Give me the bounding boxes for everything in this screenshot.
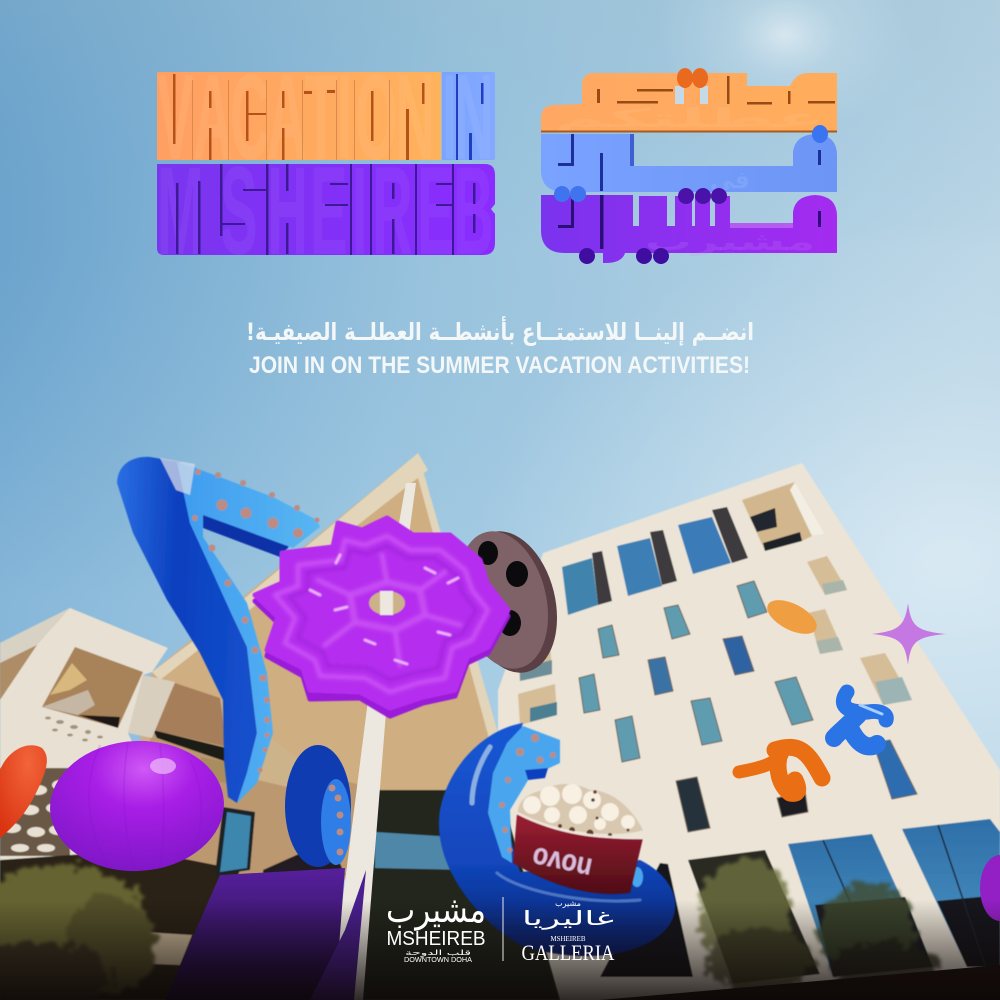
blue tentacle right (439, 723, 675, 956)
upper wide window 2 (617, 530, 677, 596)
brand on bucket: novo (529, 840, 595, 885)
purple sparkle (872, 603, 946, 665)
line 1 orange: عطلتكم (554, 104, 824, 134)
photo: right office building (498, 463, 1000, 1000)
ground floor dark zone (0, 850, 240, 1000)
logo: Msheireb: قلب الدوحة (405, 949, 471, 957)
pillar (128, 675, 175, 738)
title: Arabic (541, 68, 837, 264)
logo: Msheireb: مشيرب (386, 890, 486, 931)
bucket (513, 813, 643, 894)
logo divider (502, 897, 504, 961)
purple lattice star (255, 518, 508, 716)
popcorn (518, 784, 643, 837)
logo: Msheireb: DOWNTOWN DOHA (404, 957, 472, 964)
subtitle English: JOIN IN ON THE SUMMER VACATION ACTIVITIES! (249, 352, 750, 379)
pergola bottom right (600, 965, 1000, 1000)
line 2 blue (541, 125, 837, 194)
recessed balconies (518, 556, 912, 725)
MSHEIREB: MSHEIREB (157, 141, 494, 281)
upper wide window 3 (678, 507, 748, 574)
corner recess with window (742, 482, 825, 551)
suckers (192, 469, 320, 772)
screen dots (45, 716, 103, 742)
subtitle Arabic: انضــم إلينــا للاستمتــاع بأنشطــة العطلــة الصيفيـة! (246, 316, 754, 346)
line 1 orange (541, 68, 837, 134)
trees right (699, 857, 940, 994)
dark purple box base (165, 868, 366, 1000)
logo: Msheireb Galleria: MSHEIREB (550, 934, 586, 943)
sucker band (177, 462, 320, 803)
right tentacle sucker band (488, 726, 560, 863)
photo: left building with triangular roof (0, 453, 560, 1000)
glass side of the left block (263, 840, 345, 880)
logo: Msheireb: MSHEIREB (386, 928, 486, 950)
roof soffit (130, 453, 500, 800)
IN: IN (442, 49, 494, 186)
line 3 purple (541, 186, 837, 264)
tentacle underside strip (198, 510, 292, 557)
purple blob right edge (980, 855, 1000, 921)
orange squiggle blob (739, 747, 822, 793)
logo: Msheireb Galleria: GALLERIA (522, 940, 615, 965)
upper wide window 1 (562, 551, 612, 615)
dark bottom fade (0, 900, 1000, 1000)
blue squiggle blob (834, 692, 886, 746)
cream highlight (160, 458, 195, 495)
tentacle highlight (472, 747, 490, 803)
lower wall (150, 730, 380, 880)
logo: Msheireb (386, 890, 486, 964)
small blue tire (285, 745, 351, 867)
white sculpture pole (330, 483, 416, 1000)
VACATION: VACATION (157, 49, 435, 186)
cream corner block (0, 608, 168, 860)
line 2 blue: في (710, 166, 750, 194)
lattice screen (0, 768, 70, 856)
blue tentacle left (117, 457, 320, 803)
purple balloon (47, 737, 227, 875)
red orange blob (0, 745, 47, 838)
orange biscuit blob (762, 593, 822, 641)
star ridges (275, 536, 488, 692)
popcorn bucket (513, 784, 643, 894)
recess with screen (42, 647, 143, 728)
tree left (0, 865, 155, 1000)
film reel (444, 521, 571, 683)
logo: Msheireb Galleria: مشيرب (555, 899, 581, 908)
small windows (579, 581, 917, 832)
title: English (157, 49, 495, 281)
star centre hole (369, 591, 405, 615)
logo: Msheireb Galleria: غاليريا (522, 906, 614, 930)
line 3 purple: مشيرب (645, 228, 815, 256)
logo: Msheireb Galleria (522, 899, 615, 965)
ground floor glazing (600, 819, 1000, 984)
